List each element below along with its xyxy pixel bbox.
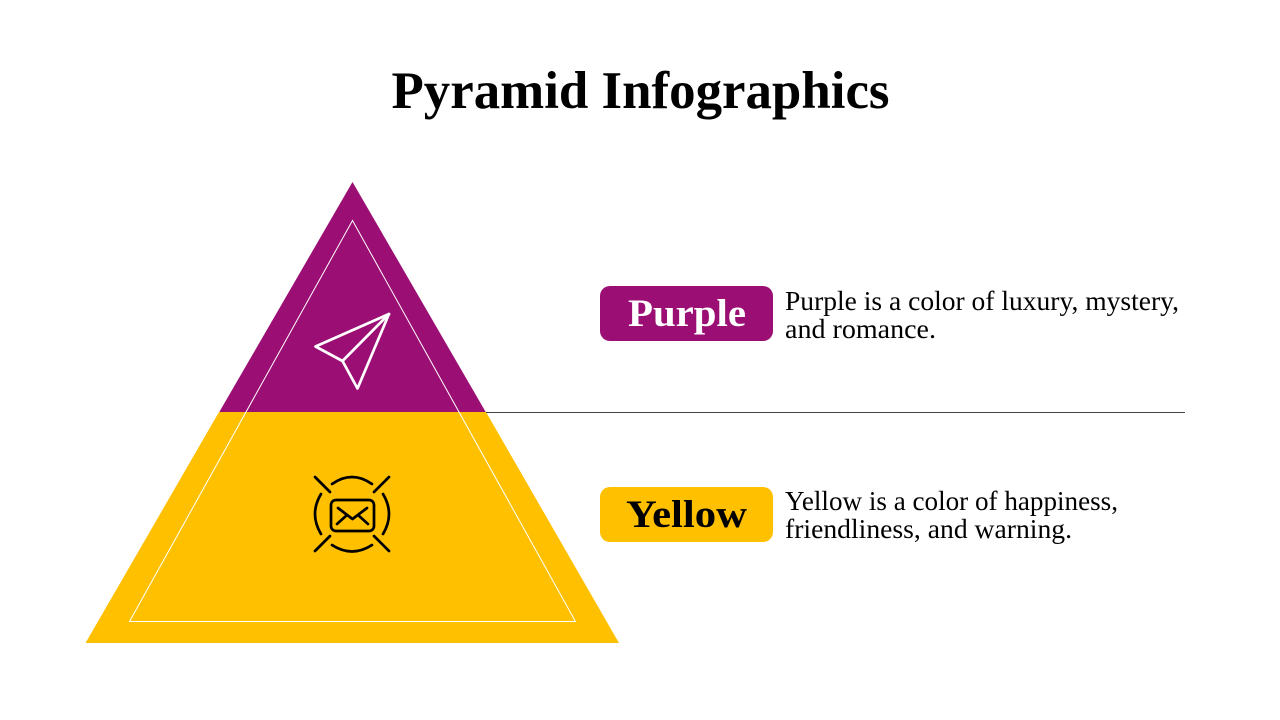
icon: envelope in circle <box>315 477 389 552</box>
text block: purple description: Purple is a color of luxury, mystery, <box>785 286 1179 316</box>
text block: yellow description <box>785 486 1118 544</box>
label: yellow: Yellow <box>626 493 747 536</box>
pyramid <box>86 182 619 643</box>
label: yellow <box>600 487 773 542</box>
label: purple <box>600 286 773 341</box>
text block: yellow description: Yellow is a color of happiness, <box>785 486 1118 516</box>
label: purple: Purple <box>628 292 746 335</box>
text block: yellow description: friendliness, and warning. <box>785 514 1072 544</box>
text block: purple description: and romance. <box>785 314 936 344</box>
title: Pyramid Infographics <box>392 62 890 120</box>
pyramid tier: yellow <box>86 412 619 643</box>
inner triangle outline <box>130 220 576 622</box>
icon: paper plane <box>316 314 389 388</box>
text block: purple description <box>785 286 1179 344</box>
divider line <box>486 412 1185 414</box>
pyramid tier: purple <box>219 182 486 412</box>
